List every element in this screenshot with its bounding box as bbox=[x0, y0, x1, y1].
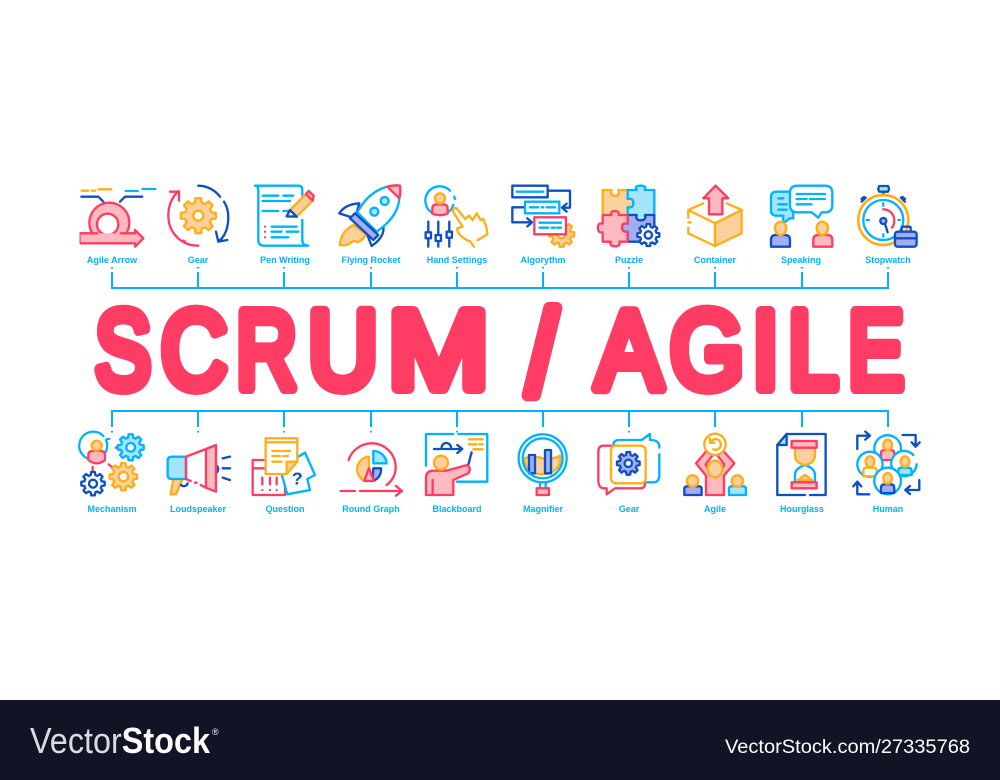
top labels: Gear bbox=[188, 255, 209, 265]
title: I bbox=[752, 289, 779, 412]
icon: magnifier bbox=[519, 434, 567, 495]
icon: puzzle bbox=[598, 186, 659, 246]
title: G bbox=[670, 289, 744, 412]
icon: round graph bbox=[341, 443, 402, 496]
title: A bbox=[596, 289, 663, 412]
bottom labels: Agile bbox=[704, 504, 726, 514]
bottom labels bbox=[87, 504, 903, 514]
footer bar: VectorStock.com/27335768 bbox=[725, 737, 970, 758]
bottom labels: Hourglass bbox=[780, 504, 824, 514]
top labels: Stopwatch bbox=[865, 255, 911, 265]
title: L bbox=[788, 289, 838, 412]
icon: container bbox=[688, 186, 742, 246]
title: M bbox=[388, 289, 489, 412]
top labels: Hand Settings bbox=[427, 255, 487, 265]
title bbox=[95, 287, 904, 420]
title: E bbox=[848, 289, 904, 412]
top labels: Agile Arrow bbox=[87, 255, 138, 265]
icon: stopwatch bbox=[858, 186, 917, 247]
bottom labels: Mechanism bbox=[87, 504, 137, 514]
footer logo: VectorStock bbox=[30, 720, 211, 761]
icon: gear with cycle arrows bbox=[168, 186, 228, 246]
top labels: Flying Rocket bbox=[341, 255, 401, 265]
bottom labels: Round Graph bbox=[342, 504, 400, 514]
icon: pen writing bbox=[255, 186, 314, 246]
icon: loudspeaker bbox=[168, 445, 230, 494]
top labels bbox=[87, 255, 911, 265]
icon: agile person with reload bbox=[684, 434, 746, 495]
top labels: Puzzle bbox=[615, 255, 643, 265]
top labels: Algorythm bbox=[520, 255, 566, 265]
title: U bbox=[308, 289, 378, 412]
bottom labels: Loudspeaker bbox=[170, 504, 226, 514]
bottom connector lines bbox=[112, 411, 888, 432]
icon: gear in speech bubbles bbox=[598, 434, 659, 494]
footer bar bbox=[0, 700, 1000, 780]
top connector lines bbox=[112, 267, 888, 288]
icon: mechanism bbox=[79, 432, 144, 495]
bottom labels: Human bbox=[873, 504, 903, 514]
icon: hand settings bbox=[425, 186, 487, 247]
bottom labels: Blackboard bbox=[432, 504, 482, 514]
title: / bbox=[527, 287, 558, 420]
icon: agile arrow bbox=[81, 189, 155, 247]
bottom labels: Question bbox=[265, 504, 305, 514]
icon: speaking bbox=[771, 186, 832, 247]
icon: blackboard bbox=[426, 434, 487, 495]
footer bar: ® bbox=[212, 727, 219, 737]
icon: question bbox=[253, 438, 315, 495]
top labels: Container bbox=[694, 255, 736, 265]
top labels: Speaking bbox=[781, 255, 821, 265]
bottom labels: Magnifier bbox=[523, 504, 563, 514]
title: C bbox=[161, 289, 227, 412]
icon: question: ? bbox=[292, 468, 303, 488]
icon: hourglass bbox=[777, 434, 826, 495]
icon: algorythm bbox=[512, 186, 574, 247]
title: S bbox=[95, 289, 151, 412]
title: R bbox=[236, 289, 297, 412]
icon: flying rocket bbox=[339, 185, 400, 246]
icon: human team bbox=[853, 432, 920, 494]
top labels: Pen Writing bbox=[260, 255, 310, 265]
bottom labels: Gear bbox=[619, 504, 640, 514]
